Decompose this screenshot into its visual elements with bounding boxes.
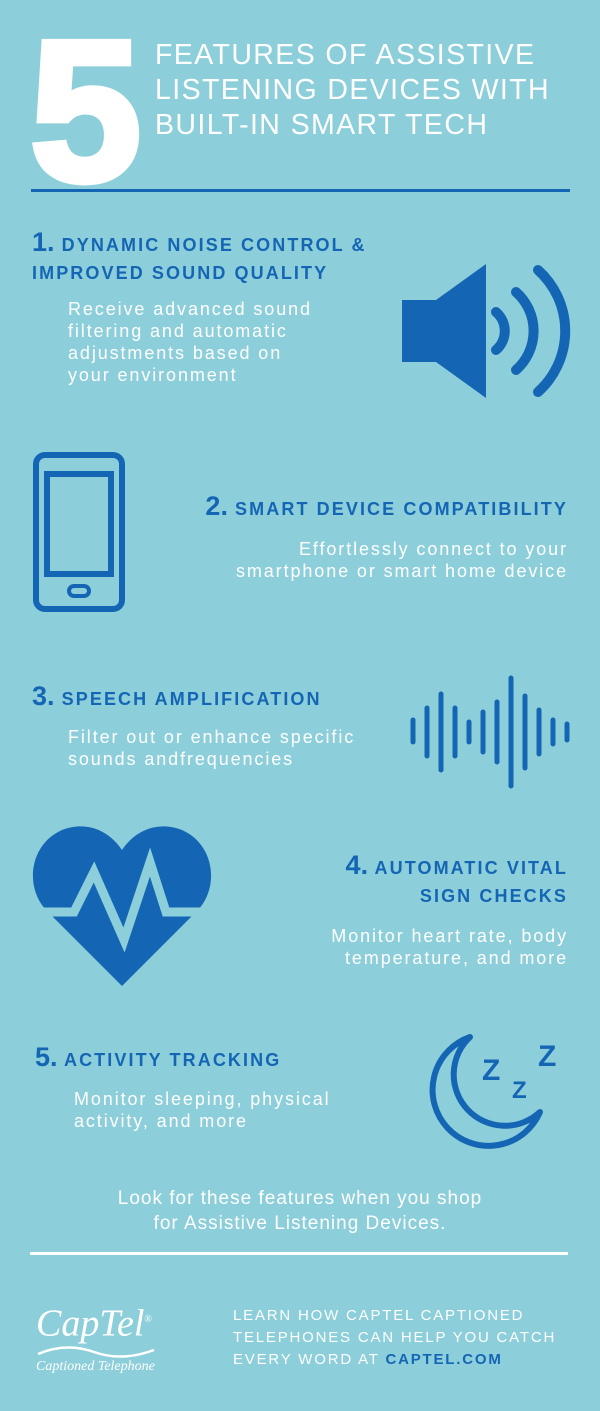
icon: moon: Z — [482, 1054, 500, 1087]
footer text: TELEPHONES CAN HELP YOU CATCH — [233, 1329, 556, 1346]
feature 5 text — [74, 1089, 331, 1131]
footer text — [233, 1307, 556, 1368]
icon: speaker — [402, 264, 570, 398]
feature 1 heading — [32, 227, 367, 283]
feature 1 text: filtering and automatic — [68, 321, 288, 341]
title: FEATURES OF ASSISTIVE — [155, 39, 535, 71]
title — [155, 39, 550, 141]
footer text: EVERY WORD AT CAPTEL.COM — [233, 1351, 503, 1368]
icon: waveform — [410, 676, 570, 788]
feature 1 heading: 1. DYNAMIC NOISE CONTROL & — [32, 227, 367, 257]
icon: phone — [33, 452, 125, 612]
feature 5 text: activity, and more — [74, 1111, 248, 1131]
feature 1 text: your environment — [68, 365, 237, 385]
big number 5: 5 — [30, 0, 141, 223]
feature 2 text — [236, 539, 568, 581]
title: LISTENING DEVICES WITH — [155, 74, 550, 106]
feature 3 text — [68, 727, 355, 769]
feature 2 text: smartphone or smart home device — [236, 561, 568, 581]
feature 4 text — [331, 926, 568, 968]
feature 3 text: sounds andfrequencies — [68, 749, 294, 769]
feature 1 text: adjustments based on — [68, 343, 282, 363]
logo: CapTel: CapTel® — [36, 1303, 152, 1345]
icon: moon: Z — [512, 1077, 527, 1104]
closing text — [118, 1188, 482, 1234]
feature 3 text: Filter out or enhance specific — [68, 727, 355, 747]
footer text: LEARN HOW CAPTEL CAPTIONED — [233, 1307, 524, 1324]
feature 5 heading: 5. ACTIVITY TRACKING — [35, 1042, 281, 1072]
closing text: Look for these features when you shop — [118, 1188, 482, 1209]
feature 3 heading: 3. SPEECH AMPLIFICATION — [32, 681, 322, 711]
icon: moon: Z — [538, 1040, 556, 1073]
feature 5 text: Monitor sleeping, physical — [74, 1089, 331, 1109]
feature 2 text: Effortlessly connect to your — [299, 539, 568, 559]
closing text: for Assistive Listening Devices. — [154, 1213, 446, 1234]
feature 4 text: Monitor heart rate, body — [331, 926, 568, 946]
icon: heart — [32, 826, 212, 986]
feature 4 heading: 4. AUTOMATIC VITAL — [346, 850, 568, 880]
feature 2 heading: 2. SMART DEVICE COMPATIBILITY — [205, 491, 568, 521]
feature 4 heading — [346, 850, 568, 906]
feature 4 text: temperature, and more — [345, 948, 568, 968]
logo: CapTel: Captioned Telephone — [36, 1359, 155, 1374]
feature 1 text — [68, 299, 312, 385]
logo: CapTel — [36, 1303, 155, 1374]
title: BUILT-IN SMART TECH — [155, 109, 488, 141]
feature 1 text: Receive advanced sound — [68, 299, 312, 319]
feature 1 heading: IMPROVED SOUND QUALITY — [32, 263, 328, 283]
icon: moon — [430, 1034, 556, 1149]
feature 4 heading: SIGN CHECKS — [420, 886, 568, 906]
